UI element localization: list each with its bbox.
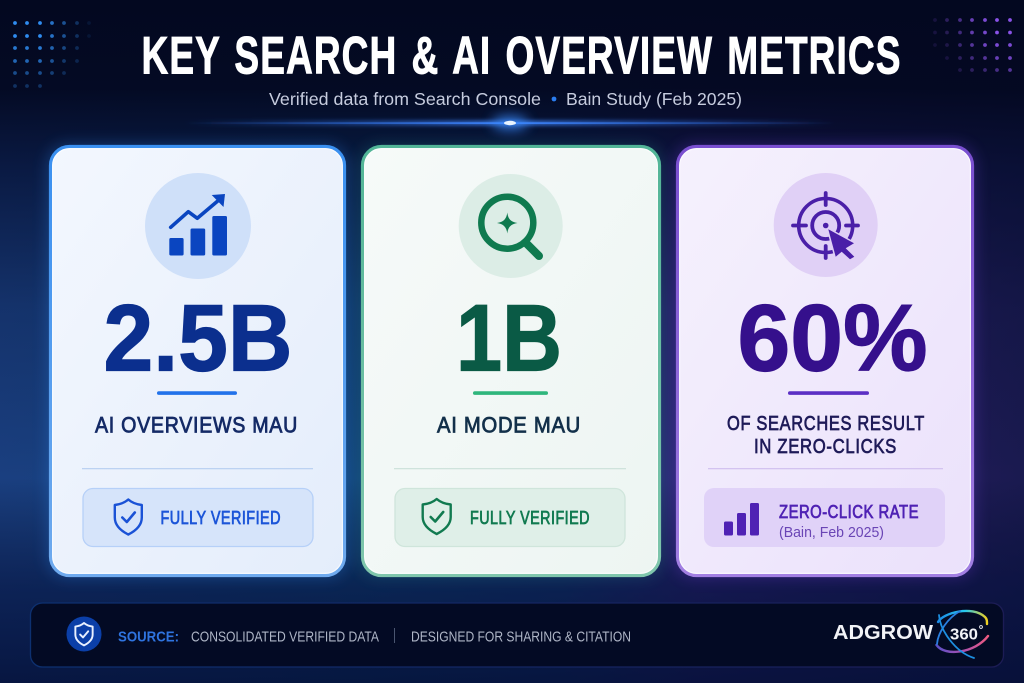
subtitle: Verified data from Search Console <box>269 89 541 109</box>
decorative dots: left <box>13 21 91 88</box>
badge text: FULLY VERIFIED <box>470 508 590 528</box>
badge: fully verified <box>83 488 313 546</box>
icon: source shield <box>66 616 102 652</box>
footer bar <box>30 603 1004 667</box>
source text: DESIGNED FOR SHARING & CITATION <box>411 628 631 646</box>
panel: AI Mode MAU <box>358 143 664 579</box>
icon: shield check <box>115 500 142 534</box>
metric label: AI MODE MAU <box>437 412 581 438</box>
logo: AdGrow 360 <box>833 611 988 658</box>
icon: target cursor <box>774 173 878 277</box>
metric value: 60% <box>738 286 928 392</box>
badge: fully verified <box>395 488 625 546</box>
icon: growth chart <box>145 173 251 279</box>
source text: SOURCE: <box>118 628 179 646</box>
accent bar <box>473 391 548 395</box>
badge note: (Bain, Feb 2025) <box>779 525 884 541</box>
metric label <box>727 412 925 458</box>
badge: zero-click rate <box>704 488 945 547</box>
logo: AdGrow 360: 360 <box>950 626 978 644</box>
source text <box>118 628 631 646</box>
icon: AI magnifier <box>459 174 563 278</box>
panel: zero-click searches <box>673 143 977 579</box>
badge text: FULLY VERIFIED <box>160 508 281 528</box>
decorative dots: right <box>933 18 1012 72</box>
card body <box>362 146 660 576</box>
icon: bars <box>724 503 759 536</box>
panel: AI Overviews MAU <box>46 143 349 579</box>
card body <box>50 146 344 576</box>
subtitle: Bain Study (Feb 2025) <box>566 89 742 109</box>
badge text: ZERO-CLICK RATE <box>779 502 919 522</box>
logo: AdGrow 360: ADGROW <box>833 621 934 644</box>
icon: shield check <box>423 499 451 534</box>
metric value: 1B <box>456 286 562 392</box>
source text: CONSOLIDATED VERIFIED DATA <box>191 628 379 646</box>
metric label: OF SEARCHES RESULT <box>727 412 925 435</box>
glowing divider <box>185 116 835 130</box>
metric value: 2.5B <box>104 286 292 392</box>
card body <box>678 146 972 576</box>
subtitle <box>269 89 742 109</box>
metric label: AI OVERVIEWS MAU <box>95 412 298 438</box>
metric label: IN ZERO-CLICKS <box>754 435 897 458</box>
accent bar <box>788 391 869 395</box>
accent bar <box>157 391 237 395</box>
